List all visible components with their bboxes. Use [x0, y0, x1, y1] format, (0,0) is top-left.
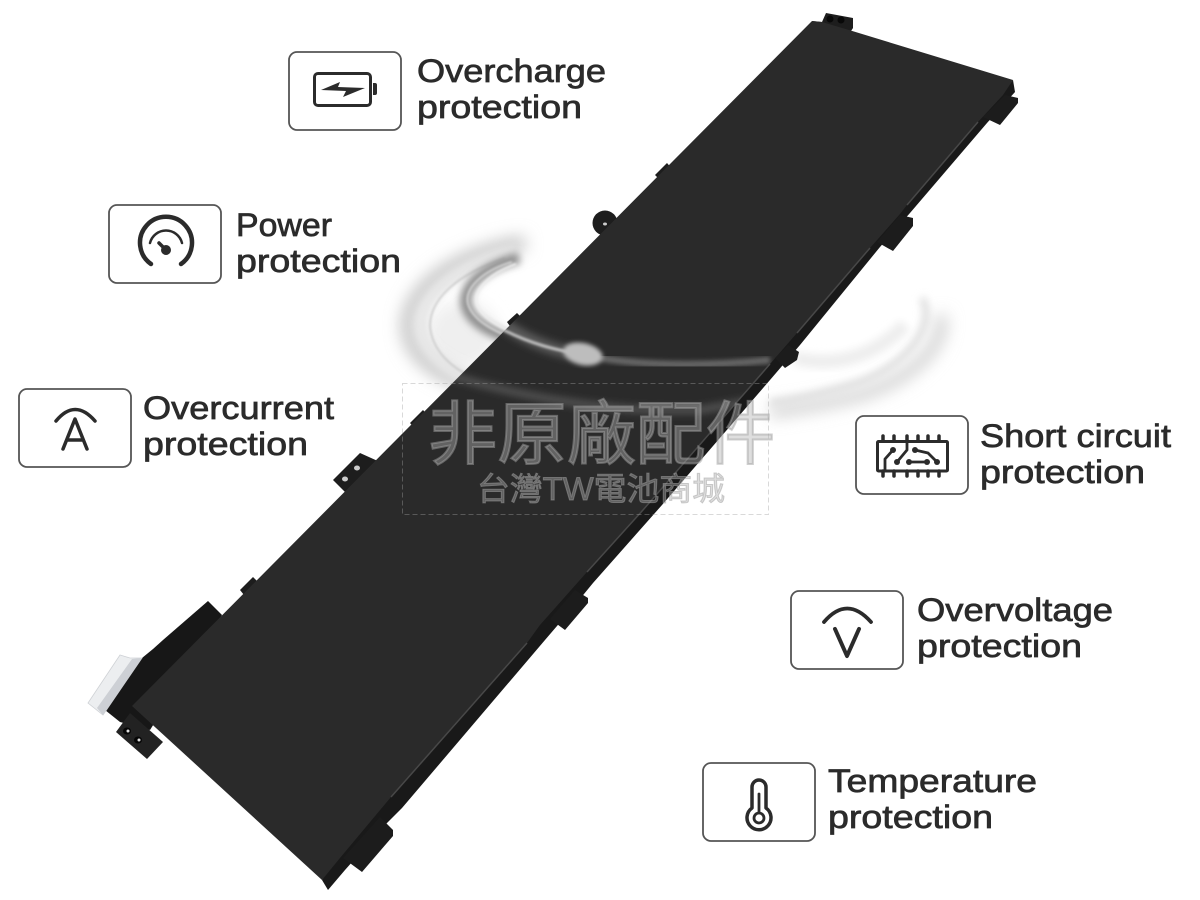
icon box	[791, 591, 903, 669]
white connector	[88, 655, 142, 715]
swirl behind battery	[408, 243, 941, 412]
feature: overvoltage protection	[791, 591, 1113, 669]
battery	[88, 13, 1018, 890]
icon: circuit chip	[878, 436, 948, 476]
label: Overcharge	[417, 53, 606, 89]
label: protection	[417, 89, 582, 125]
label: Overvoltage	[917, 592, 1113, 628]
icon: battery with bolt	[314, 74, 377, 106]
label: protection	[917, 628, 1082, 664]
feature: power protection	[109, 205, 401, 283]
label: Power	[236, 207, 332, 243]
label: protection	[828, 799, 993, 835]
label: Temperature	[828, 763, 1037, 799]
watermark	[402, 384, 775, 514]
feature: short circuit protection	[856, 416, 1171, 494]
watermark main text: 非原廠配件	[428, 396, 775, 473]
watermark frame	[402, 384, 768, 514]
bottom mounting tab	[116, 713, 163, 759]
label: Overcurrent	[143, 390, 334, 426]
main top face	[132, 21, 1013, 880]
large side tab	[333, 453, 380, 492]
feature: temperature protection	[703, 763, 1037, 841]
icon box	[856, 416, 968, 494]
icon: gauge	[140, 217, 192, 264]
label: protection	[143, 426, 308, 462]
label: protection	[980, 454, 1145, 490]
icon: thermometer	[747, 780, 771, 830]
icon: ampere	[56, 410, 95, 449]
swirl over battery	[440, 325, 780, 411]
upper left edge tabs	[240, 163, 673, 600]
icon: volt	[824, 608, 871, 656]
icon box	[19, 389, 131, 467]
icon box	[703, 763, 815, 841]
label: Short circuit	[980, 418, 1171, 454]
side wall	[322, 80, 1015, 890]
side rim highlights	[391, 122, 978, 797]
icon box	[289, 52, 401, 130]
label: protection	[236, 243, 401, 279]
feature: overcurrent protection	[19, 389, 334, 467]
right edge clips	[343, 95, 1018, 872]
screw hole	[603, 222, 607, 226]
feature: overcharge protection	[289, 52, 606, 130]
icon box	[109, 205, 221, 283]
watermark sub text: 台灣TW電池商城	[477, 471, 725, 507]
ribbon cable	[105, 601, 222, 730]
top corner tab	[812, 13, 853, 36]
